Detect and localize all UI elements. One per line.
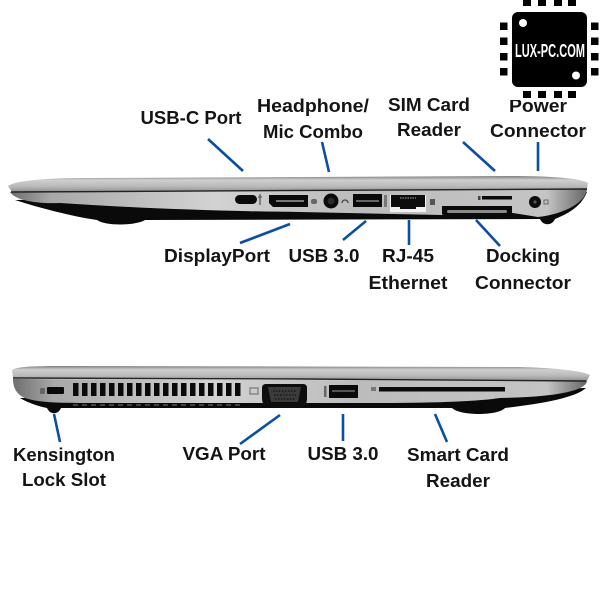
port: RJ-45	[390, 195, 435, 212]
label: Power Connector	[490, 95, 586, 141]
label: Docking Connector: Docking	[486, 245, 560, 266]
label: Headphone/Mic Combo: Headphone/	[257, 95, 369, 116]
logo: LUX-PC.COM chip	[490, 0, 600, 100]
label: RJ-45 Ethernet	[368, 245, 448, 293]
port: DisplayPort	[269, 195, 317, 207]
laptop underside shadow	[20, 388, 586, 414]
port: power connector	[529, 196, 548, 208]
ventilation grille	[73, 383, 240, 396]
label: Docking Connector	[475, 245, 571, 293]
port: smart card reader	[371, 387, 505, 392]
port: USB 3.0	[324, 385, 358, 398]
laptop: top side view	[8, 176, 588, 224]
label: Kensington Lock Slot	[13, 444, 115, 490]
laptop base	[13, 379, 587, 403]
laptop: bottom side view	[12, 366, 590, 414]
rubber foot strip	[73, 404, 241, 406]
port: USB-C	[235, 194, 262, 205]
label: VGA Port: VGA Port	[182, 443, 266, 464]
label: RJ-45 Ethernet: RJ-45	[382, 245, 434, 266]
port: audio jack	[324, 194, 348, 208]
leader lines	[54, 139, 538, 444]
label: Power Connector: Power	[509, 95, 567, 116]
laptop lid	[12, 366, 590, 381]
label: Docking Connector: Connector	[475, 272, 571, 293]
label: Headphone/Mic Combo	[257, 95, 369, 142]
label: DisplayPort: DisplayPort	[164, 245, 270, 266]
port: SIM card reader	[478, 196, 512, 200]
label: USB-C Port: USB-C Port	[140, 107, 242, 128]
label: Kensington Lock Slot: Kensington	[13, 444, 115, 465]
laptop base	[10, 189, 587, 217]
port: VGA	[250, 384, 307, 407]
label: Smart Card Reader	[407, 444, 509, 491]
label: Headphone/Mic Combo: Mic Combo	[263, 121, 363, 142]
label: USB 3.0: USB 3.0	[288, 245, 360, 266]
laptop lid	[8, 176, 588, 192]
label: SIM Card Reader: Reader	[397, 119, 461, 140]
port: USB 3.0	[353, 194, 387, 207]
label: USB 3.0: USB 3.0	[308, 443, 378, 464]
label: Smart Card Reader: Reader	[426, 470, 490, 491]
port: Kensington lock slot	[40, 387, 64, 394]
label: Power Connector: Connector	[490, 120, 586, 141]
label: Kensington Lock Slot: Lock Slot	[22, 469, 106, 490]
label: Smart Card Reader: Smart Card	[407, 444, 509, 465]
port: docking connector	[442, 206, 512, 218]
label: SIM Card Reader	[388, 94, 470, 140]
laptop underside shadow	[15, 192, 587, 224]
label: SIM Card Reader: SIM Card	[388, 94, 470, 115]
label: RJ-45 Ethernet: Ethernet	[368, 272, 448, 293]
